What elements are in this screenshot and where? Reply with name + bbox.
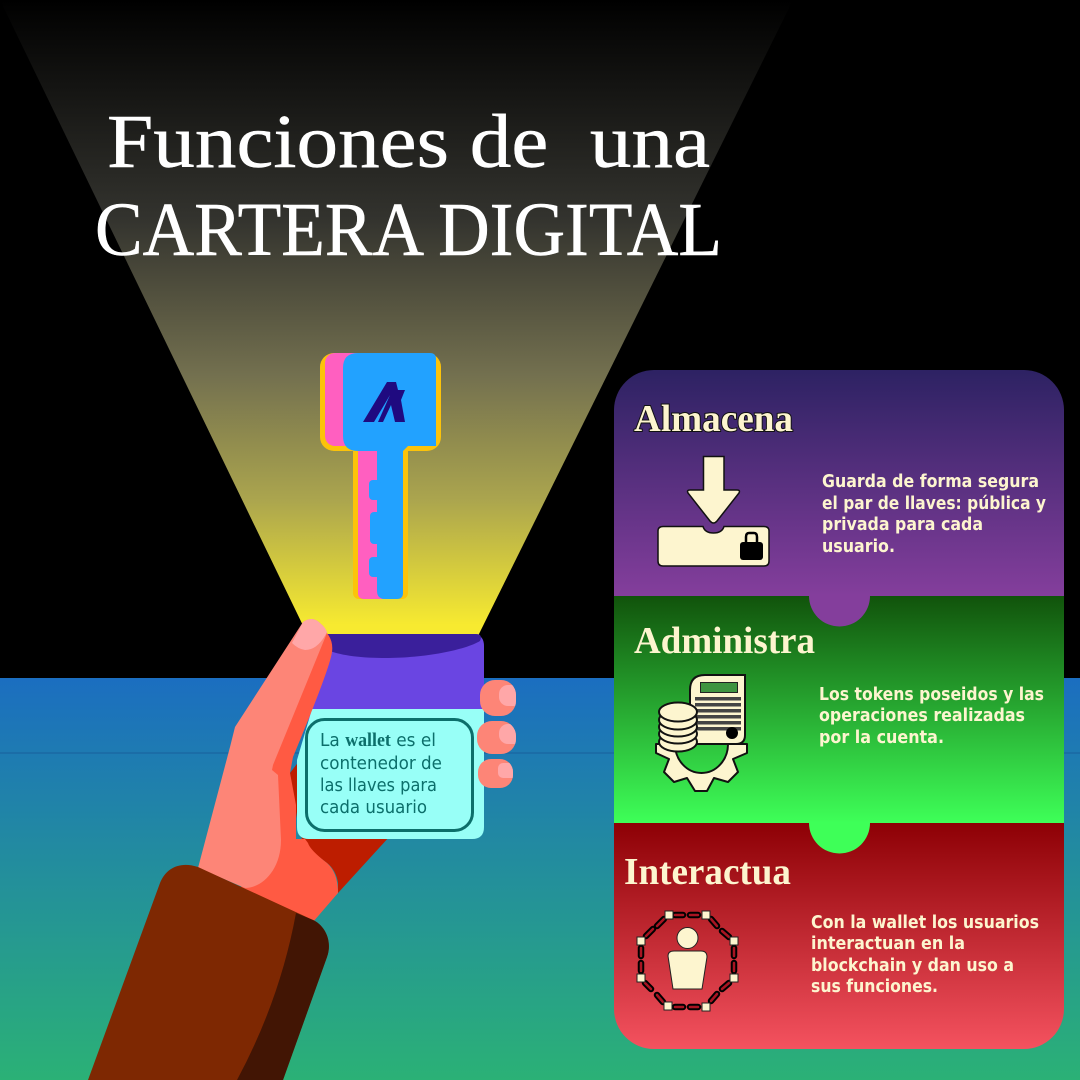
title: Funciones de una — [107, 100, 710, 184]
text: Almacena description — [822, 472, 1047, 557]
icon: document, coins and gear — [656, 675, 747, 791]
panel: Administra — [614, 596, 1064, 823]
wallet device — [290, 634, 484, 839]
icon: user in chain ring — [637, 911, 738, 1011]
sleeve — [88, 865, 329, 1080]
panel: Interactua — [614, 823, 1064, 1049]
title: CARTERA DIGITAL — [95, 188, 722, 272]
text: Almacena description: el par de llaves: pública y — [822, 494, 1047, 514]
text: Interactua description: blockchain y dan uso a — [811, 956, 1014, 976]
wallet label: cada usuario — [320, 798, 427, 818]
title — [95, 100, 722, 272]
icon: key logo — [363, 382, 405, 422]
text: Administra description: operaciones realizadas — [819, 706, 1025, 726]
background: sea gradient — [0, 678, 1080, 1080]
wallet label: La wallet es el — [320, 731, 436, 751]
wallet label: las llaves para — [320, 776, 437, 796]
text: Administra description — [819, 685, 1044, 748]
wallet label — [306, 720, 472, 830]
background: night sky — [0, 0, 1080, 678]
hand: thumb and palm — [198, 619, 338, 922]
text: Almacena description: Guarda de forma segura — [822, 472, 1039, 492]
text: Interactua description: Con la wallet los usuarios — [811, 913, 1039, 933]
hand: fingers — [477, 680, 516, 788]
light beam — [0, 0, 793, 640]
wallet label: contenedor de — [320, 754, 442, 774]
text: Interactua description: sus funciones. — [811, 977, 938, 997]
panel: Almacena — [614, 370, 1064, 596]
text: Administra description: por la cuenta. — [819, 728, 944, 748]
text: Interactua description: interactuan en la — [811, 934, 965, 954]
heading: Administra: Administra — [634, 620, 815, 662]
panel: functions — [614, 370, 1064, 1049]
hand: dark palm shadow — [290, 760, 400, 893]
icon: key — [320, 353, 441, 599]
heading: Interactua: Interactua — [624, 851, 791, 893]
text: Interactua description — [811, 913, 1039, 997]
text: Almacena description: privada para cada — [822, 515, 983, 535]
icon: download to locked tray — [658, 456, 769, 566]
heading: Almacena: Almacena — [634, 398, 793, 440]
text: Administra description: Los tokens poseidos y las — [819, 685, 1044, 705]
text: Almacena description: usuario. — [822, 537, 895, 557]
